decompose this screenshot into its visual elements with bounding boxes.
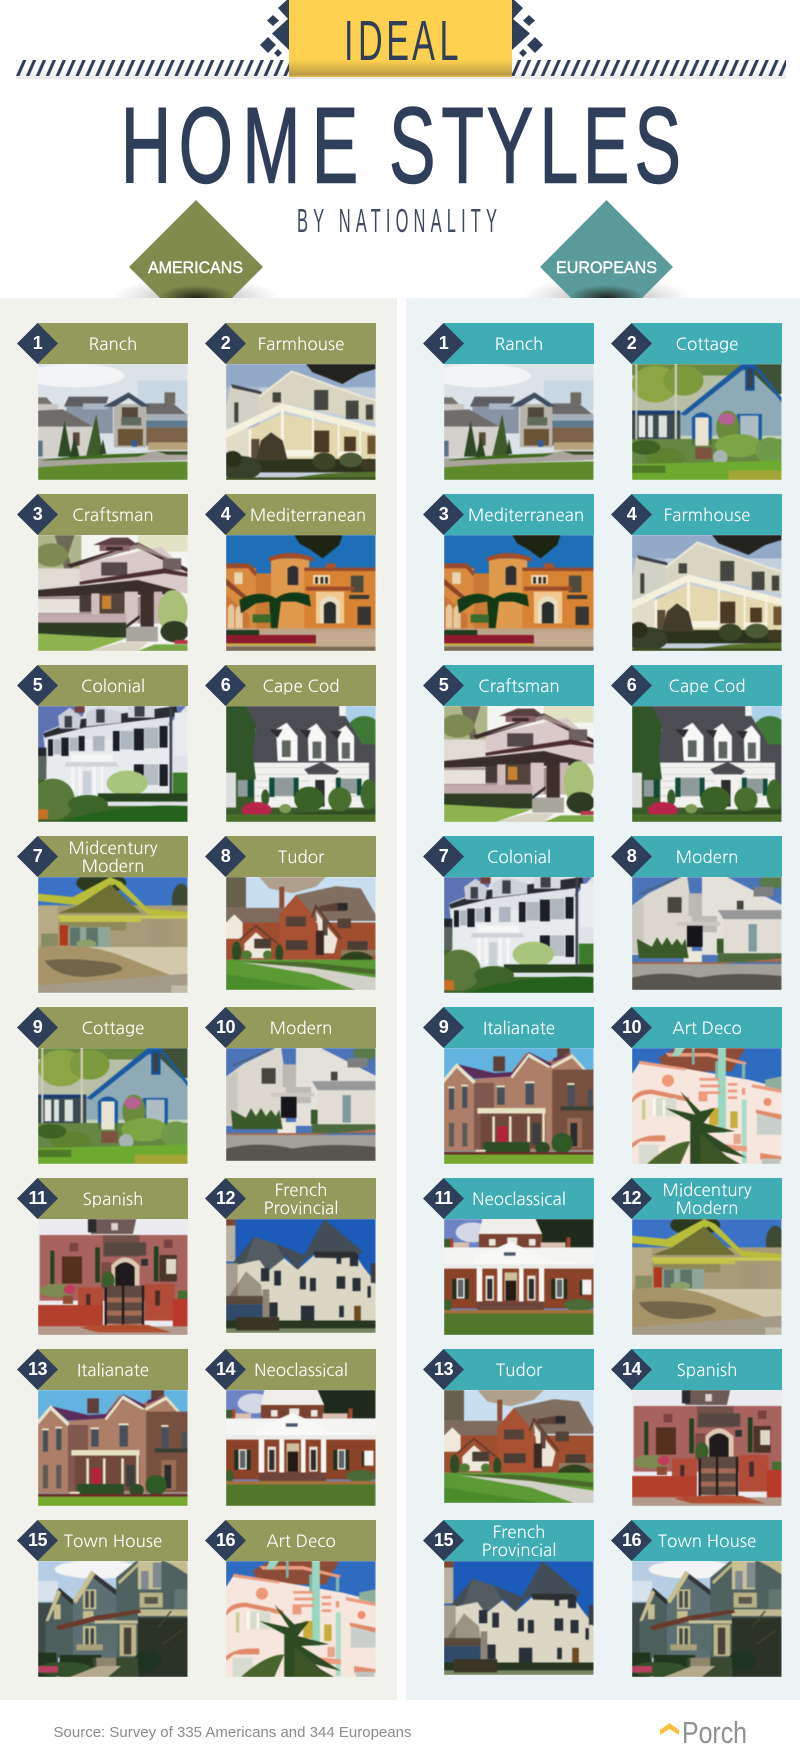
number 6: [205, 665, 246, 706]
number 13: 13: [434, 1359, 453, 1379]
number 15: [423, 1520, 464, 1561]
photo: midcentury modern house: [632, 1219, 782, 1335]
label: Cottage: [632, 323, 782, 364]
card: 8 Modern: [611, 836, 782, 990]
card: 12 Midcentury Modern: [611, 1178, 782, 1335]
card: 14 Neoclassical: [205, 1349, 376, 1506]
photo: modern house: [226, 1048, 376, 1161]
photo: cottage: [38, 1048, 188, 1164]
card: 5 Craftsman: [423, 665, 594, 822]
header: banner, stripes and title: [16, 0, 786, 298]
card: 1 Ranch: [423, 323, 594, 480]
label: Cape Cod: [226, 665, 376, 706]
card: 13 Tudor: [423, 1349, 594, 1503]
card: 13 Italianate: [17, 1349, 188, 1506]
banner: IDEAL: [289, 0, 512, 77]
number 13: [17, 1349, 58, 1390]
number 7: [17, 836, 58, 877]
label: Art Deco: [632, 1007, 782, 1048]
number 10: [611, 1007, 652, 1048]
label: Craftsman: [444, 665, 594, 706]
label: Italianate: [38, 1349, 188, 1390]
number 10: [205, 1007, 246, 1048]
label: Farmhouse: Farmhouse: [258, 336, 344, 352]
number 12: [205, 1178, 246, 1219]
label: Cape Cod: [632, 665, 782, 706]
label: Spanish: Spanish: [677, 1362, 737, 1378]
photo: cape cod house: [632, 706, 782, 822]
number 8: 8: [221, 846, 230, 866]
number 12: 12: [622, 1188, 641, 1208]
decorative stripe band: [16, 60, 786, 79]
card: 3 Craftsman: [17, 494, 188, 651]
number 5: 5: [33, 675, 42, 695]
number 11: [423, 1178, 464, 1219]
photo: art deco building: [226, 1561, 376, 1677]
label: Italianate: Italianate: [483, 1020, 555, 1036]
card: 15 French Provincial: [423, 1520, 594, 1677]
number 11: 11: [434, 1188, 453, 1208]
number 15: 15: [434, 1530, 453, 1550]
photo: midcentury modern house: [38, 877, 188, 993]
label: Mediterranean: Mediterranean: [250, 506, 366, 524]
label: Town House: [632, 1520, 782, 1561]
number 2: 2: [221, 333, 230, 353]
label: Italianate: [444, 1007, 594, 1048]
photo: colonial house: [38, 706, 188, 822]
label: Ranch: [444, 323, 594, 364]
number 2: [611, 323, 652, 364]
number 3: 3: [439, 504, 448, 524]
number 13: [423, 1349, 464, 1390]
number 7: 7: [33, 846, 42, 866]
number 10: 10: [216, 1017, 235, 1037]
number 9: 9: [33, 1017, 42, 1037]
photo: french provincial house: [444, 1561, 594, 1675]
label: Farmhouse: [632, 494, 782, 535]
title: HOME STYLES: HOME STYLES: [121, 86, 681, 206]
number 4: [611, 494, 652, 535]
photo: town house: [38, 1561, 188, 1677]
photo: cottage: [632, 364, 782, 480]
card: 7 Colonial: [423, 836, 594, 993]
photo: ranch house: [444, 364, 594, 480]
photo: tudor house: [226, 877, 376, 990]
number 3: [423, 494, 464, 535]
badge: AMERICANS: [111, 200, 281, 320]
number 14: [205, 1349, 246, 1390]
label: Spanish: [632, 1349, 782, 1390]
number 8: [611, 836, 652, 877]
label: Town House: [38, 1520, 188, 1561]
label: French Provincial: Provincial: [482, 1542, 556, 1558]
label: Ranch: [38, 323, 188, 364]
banner: IDEAL: IDEAL: [344, 8, 459, 72]
number 14: 14: [622, 1359, 641, 1379]
label: French Provincial: [444, 1520, 594, 1561]
card: 10 Modern: [205, 1007, 376, 1161]
label: Mediterranean: [444, 494, 594, 535]
photo: tudor house: [444, 1390, 594, 1503]
number 12: [611, 1178, 652, 1219]
label: Mediterranean: Mediterranean: [468, 506, 584, 524]
photo: farmhouse: [632, 535, 782, 651]
icon: right diamonds: [512, 0, 543, 57]
card: 16 Art Deco: [205, 1520, 376, 1677]
card: 5 Colonial: [17, 665, 188, 822]
card: 8 Tudor: [205, 836, 376, 990]
label: Colonial: Colonial: [81, 678, 145, 694]
label: Craftsman: Craftsman: [72, 506, 154, 524]
number 11: [17, 1178, 58, 1219]
panel: Americans ranking: [0, 298, 397, 1700]
number 8: 8: [627, 846, 636, 866]
label: Craftsman: Craftsman: [478, 678, 560, 694]
number 5: [17, 665, 58, 706]
label: Tudor: Tudor: [278, 848, 324, 866]
label: Spanish: Spanish: [83, 1190, 143, 1208]
number 14: [611, 1349, 652, 1390]
number 15: 15: [28, 1530, 47, 1550]
icon: left diamonds: [260, 0, 289, 57]
photo: modern house: [632, 877, 782, 990]
card: 16 Town House: [611, 1520, 782, 1677]
photo: neoclassical house: [444, 1219, 594, 1335]
label: Neoclassical: [444, 1178, 594, 1219]
label: Cottage: [38, 1007, 188, 1048]
photo: spanish house: [632, 1390, 782, 1506]
number 2: 2: [627, 333, 636, 353]
label: Modern: Modern: [676, 848, 738, 866]
label: French Provincial: French: [275, 1182, 327, 1198]
card: 6 Cape Cod: [205, 665, 376, 822]
photo: french provincial house: [226, 1219, 376, 1333]
number 7: [423, 836, 464, 877]
label: Midcentury Modern: Modern: [676, 1200, 738, 1216]
photo: mediterranean house: [444, 535, 594, 651]
card: 4 Farmhouse: [611, 494, 782, 651]
card: 11 Spanish: [17, 1178, 188, 1335]
label: Neoclassical: Neoclassical: [254, 1362, 348, 1378]
card: 9 Cottage: [17, 1007, 188, 1164]
label: Art Deco: [226, 1520, 376, 1561]
number 10: 10: [622, 1017, 641, 1037]
label: Art Deco: Art Deco: [266, 1532, 336, 1550]
card: 15 Town House: [17, 1520, 188, 1677]
label: Tudor: Tudor: [496, 1362, 542, 1378]
number 15: [17, 1520, 58, 1561]
number 13: 13: [28, 1359, 47, 1379]
number 11: 11: [28, 1188, 47, 1208]
number 9: [17, 1007, 58, 1048]
label: Spanish: [38, 1178, 188, 1219]
number 7: 7: [439, 846, 448, 866]
label: Town House: Town House: [64, 1532, 162, 1550]
number 14: 14: [216, 1359, 235, 1379]
number 1: [423, 323, 464, 364]
number 9: 9: [439, 1017, 448, 1037]
label: Ranch: Ranch: [89, 336, 137, 352]
footer: [0, 1700, 800, 1761]
label: Midcentury Modern: Midcentury: [68, 840, 158, 856]
number 4: 4: [627, 504, 636, 524]
photo: colonial house: [444, 877, 594, 993]
card: 3 Mediterranean: [423, 494, 594, 651]
photo: farmhouse: [226, 364, 376, 480]
photo: neoclassical house: [226, 1390, 376, 1506]
label: Midcentury Modern: Modern: [82, 858, 144, 874]
number 4: 4: [221, 504, 230, 524]
label: French Provincial: French: [493, 1524, 545, 1540]
card: 10 Art Deco: [611, 1007, 782, 1164]
label: Neoclassical: [226, 1349, 376, 1390]
number 6: 6: [627, 675, 636, 695]
label: Colonial: [38, 665, 188, 706]
subtitle: BY NATIONALITY: BY NATIONALITY: [297, 202, 497, 240]
label: Modern: Modern: [270, 1020, 332, 1036]
photo: cape cod house: [226, 706, 376, 822]
label: Cottage: Cottage: [676, 336, 738, 352]
card: 12 French Provincial: [205, 1178, 376, 1333]
number 3: 3: [33, 504, 42, 524]
number 1: 1: [439, 333, 448, 353]
photo: italianate house: [444, 1048, 594, 1164]
number 2: [205, 323, 246, 364]
number 8: [205, 836, 246, 877]
label: French Provincial: [226, 1178, 376, 1219]
card: 2 Cottage: [611, 323, 782, 480]
card: 2 Farmhouse: [205, 323, 376, 480]
number 16: [205, 1520, 246, 1561]
label: Cape Cod: Cape Cod: [262, 678, 340, 694]
Porch logo text: Porch: [682, 1715, 747, 1750]
label: Cape Cod: Cape Cod: [668, 678, 746, 694]
label: Craftsman: [38, 494, 188, 535]
number 4: [205, 494, 246, 535]
card: 14 Spanish: [611, 1349, 782, 1506]
card: 11 Neoclassical: [423, 1178, 594, 1335]
number 16: 16: [216, 1530, 235, 1550]
number 12: 12: [216, 1188, 235, 1208]
photo: town house: [632, 1561, 782, 1677]
label: Colonial: [444, 836, 594, 877]
label: Farmhouse: [226, 323, 376, 364]
card: 1 Ranch: [17, 323, 188, 480]
label: Art Deco: Art Deco: [672, 1020, 742, 1036]
label: Farmhouse: Farmhouse: [664, 506, 750, 524]
label: Town House: Town House: [658, 1532, 756, 1550]
label: Cottage: Cottage: [82, 1020, 144, 1036]
card: 7 Midcentury Modern: [17, 836, 188, 993]
number 6: [611, 665, 652, 706]
panel: Europeans ranking: [406, 298, 800, 1700]
number 6: 6: [221, 675, 230, 695]
label: Ranch: Ranch: [495, 336, 543, 352]
number 5: 5: [439, 675, 448, 695]
photo: ranch house: [38, 364, 188, 480]
label: Neoclassical: Neoclassical: [472, 1190, 566, 1208]
label: Italianate: Italianate: [77, 1362, 149, 1378]
label: Mediterranean: [226, 494, 376, 535]
label: Tudor: [226, 836, 376, 877]
icon: Porch chevron: [660, 1723, 679, 1735]
label: Midcentury Modern: [38, 836, 188, 877]
photo: italianate house: [38, 1390, 188, 1506]
label: Modern: [632, 836, 782, 877]
photo: spanish house: [38, 1219, 188, 1335]
number 3: [17, 494, 58, 535]
label: Midcentury Modern: Midcentury: [662, 1182, 752, 1198]
label: Colonial: Colonial: [487, 848, 551, 866]
number 16: [611, 1520, 652, 1561]
photo: art deco building: [632, 1048, 782, 1164]
number 16: 16: [622, 1530, 641, 1550]
photo: mediterranean house: [226, 535, 376, 651]
card: 9 Italianate: [423, 1007, 594, 1164]
card: 6 Cape Cod: [611, 665, 782, 822]
badge: EUROPEANS: [522, 200, 692, 320]
photo: craftsman house: [444, 706, 594, 822]
number 9: [423, 1007, 464, 1048]
number 1: [17, 323, 58, 364]
label: Tudor: [444, 1349, 594, 1390]
number 1: 1: [33, 333, 42, 353]
badge: AMERICANS: AMERICANS: [148, 258, 243, 277]
label: Modern: [226, 1007, 376, 1048]
source note: Source: Survey of 335 Americans and 344 Europeans: [54, 1725, 411, 1741]
badge: EUROPEANS: EUROPEANS: [556, 258, 657, 277]
label: Midcentury Modern: [632, 1178, 782, 1219]
photo: craftsman house: [38, 535, 188, 651]
label: French Provincial: Provincial: [264, 1200, 338, 1216]
card: 4 Mediterranean: [205, 494, 376, 651]
number 5: [423, 665, 464, 706]
